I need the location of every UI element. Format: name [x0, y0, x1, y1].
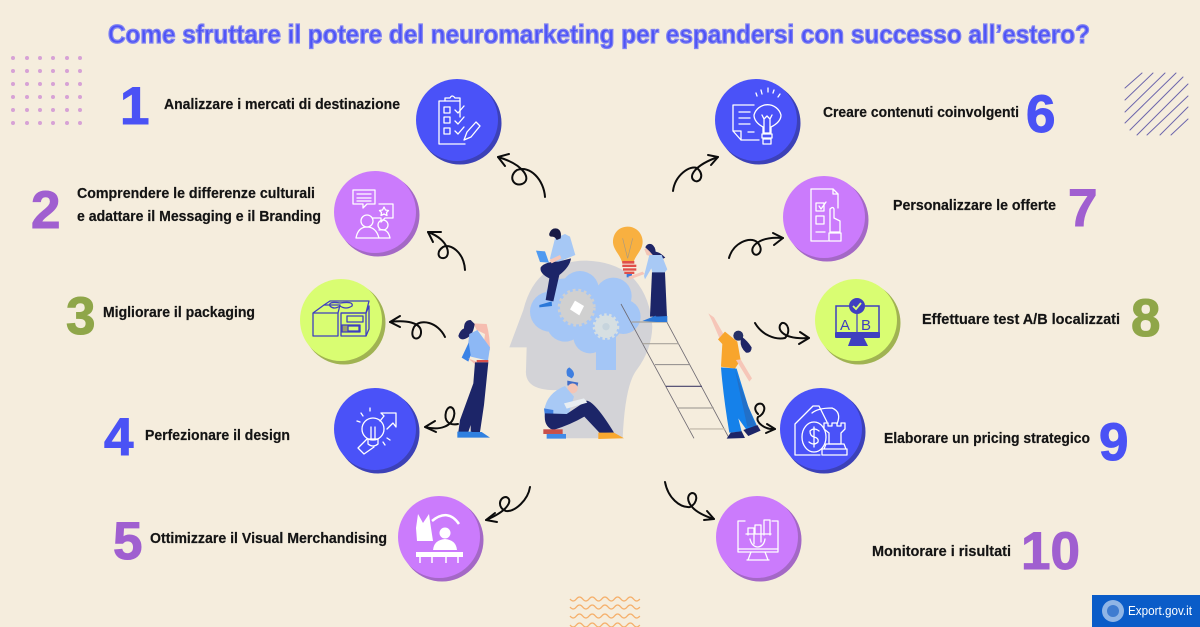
person holding bulb: [628, 244, 667, 322]
label 2: e adattare il Messaging e il Branding: [77, 209, 321, 225]
number 7: 7: [1068, 179, 1097, 238]
icon circle 3: [300, 279, 386, 364]
icon: A/B monitor: [835, 298, 880, 346]
central illustration: [509, 227, 761, 439]
icon circle 10: [716, 496, 802, 582]
icon: price tag and chess rook: [795, 406, 847, 455]
label 4: Perfezionare il design: [145, 428, 290, 444]
ladder: [621, 304, 729, 438]
light bulb: [613, 227, 643, 277]
brain: [530, 271, 641, 370]
gears: [560, 291, 617, 338]
label 9: Elaborare un pricing strategico: [884, 431, 1090, 447]
icon circle 2: [334, 171, 420, 256]
arrow 10: [665, 482, 714, 520]
number 9: 9: [1099, 413, 1128, 472]
label 10: Monitorare i risultati: [872, 544, 1011, 560]
logo: Export.gov.it: [1092, 595, 1200, 627]
icon circle 8: [815, 279, 900, 364]
item 4: [104, 388, 420, 474]
icon circle 1: [416, 79, 502, 164]
label 8: Effettuare test A/B localizzati: [922, 312, 1120, 328]
head silhouette: [509, 261, 652, 438]
number 10: 10: [1021, 522, 1080, 581]
icon: monitor with chart: [738, 520, 778, 560]
number 6: 6: [1026, 85, 1055, 144]
icon: A/B monitor: B: [861, 317, 871, 334]
arrow 7: [729, 233, 783, 258]
decorative waves: [570, 597, 640, 627]
item 3: [66, 279, 386, 364]
standing woman looking up: [457, 320, 490, 438]
icon circle 9: [780, 388, 866, 474]
icon: A/B monitor: A: [840, 317, 850, 334]
icon: merchandising: [416, 514, 463, 563]
number 4: 4: [104, 408, 134, 467]
label 7: Personalizzare le offerte: [893, 198, 1056, 214]
reading person: [543, 367, 624, 439]
pointing person: [708, 313, 761, 439]
icon circle 7: [783, 176, 868, 262]
arrow 2: [428, 232, 465, 270]
icon circle 6: [715, 79, 800, 164]
icon: people with speech bubbles: [353, 190, 393, 238]
icon: checklist: [439, 96, 480, 144]
item 1: [120, 77, 502, 164]
item 9: [780, 388, 1128, 474]
item 7: [783, 176, 1097, 262]
icon: form with hand: [811, 189, 841, 241]
decorative hatch: [1125, 73, 1188, 135]
label 6: Creare contenuti coinvolgenti: [823, 105, 1019, 121]
arrow 4: [425, 407, 458, 432]
item 2: [31, 171, 420, 256]
item 10: [716, 496, 1080, 582]
title: Come sfruttare il potere del neuromarketing per espandersi con successo all’estero?: [108, 19, 1090, 49]
icon circle 5: [398, 496, 484, 582]
icon circle 4: [334, 388, 420, 474]
item 5: [113, 496, 484, 582]
label 1: Analizzare i mercati di destinazione: [164, 97, 400, 113]
arrow 5: [486, 487, 530, 522]
number 1: 1: [120, 77, 149, 136]
person with laptop: [536, 228, 575, 307]
arrow 6: [673, 155, 718, 191]
arrow 9: [755, 404, 775, 433]
label 5: Ottimizzare il Visual Merchandising: [150, 531, 387, 547]
label 3: Migliorare il packaging: [103, 305, 255, 321]
icon: bulb with arrow: [357, 408, 396, 454]
label 2: Comprendere le differenze culturali: [77, 186, 315, 202]
number 5: 5: [113, 512, 142, 571]
arrow 3: [390, 316, 445, 339]
arrow 1: [498, 154, 545, 197]
number 8: 8: [1131, 289, 1160, 348]
icon: document with bulb: [733, 88, 781, 144]
logo: Export.gov.it: Export.gov.it: [1128, 604, 1192, 618]
item 6: [715, 79, 1055, 164]
number 3: 3: [66, 287, 95, 346]
icon: package: [313, 301, 369, 336]
decorative dot grid: [11, 56, 82, 125]
number 2: 2: [31, 181, 60, 240]
arrow 8: [755, 323, 809, 344]
item 8: [815, 279, 1160, 364]
label 2: [77, 186, 321, 225]
